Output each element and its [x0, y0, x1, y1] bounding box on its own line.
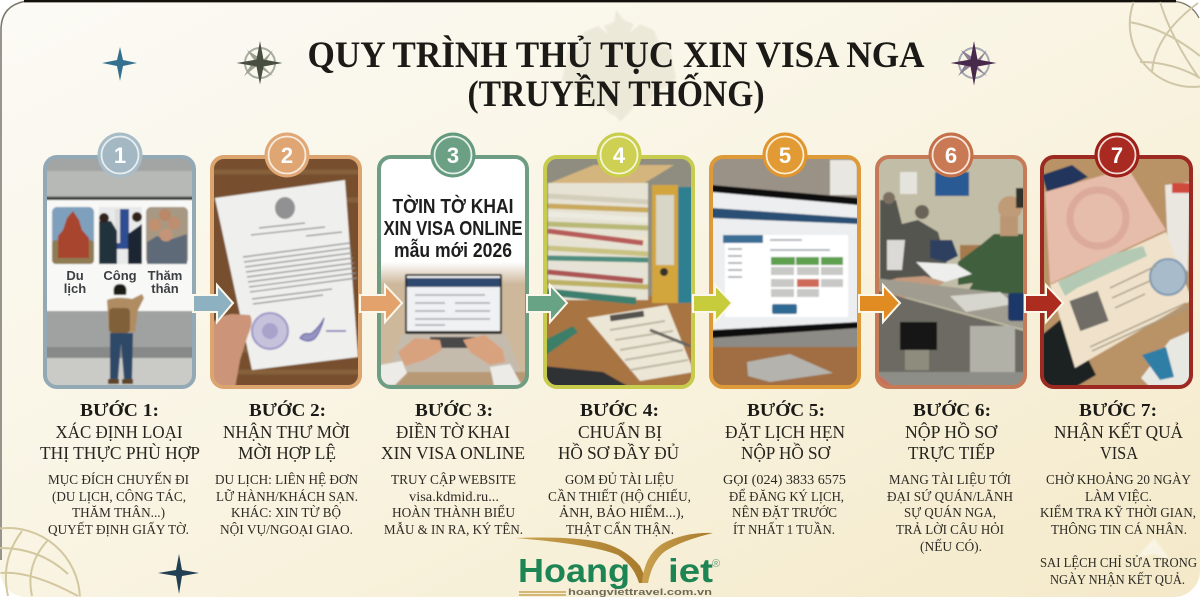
card frames [45, 157, 1191, 387]
decoration: globe top right [1129, 2, 1200, 87]
text block: step 6: BƯỚC 6: [913, 400, 991, 420]
text block: step 5: ĐỂ ĐĂNG KÝ LỊCH, [729, 488, 844, 505]
text block: step 4 [548, 400, 691, 538]
text block: step 7: THÔNG TIN CÁ NHÂN. [1051, 521, 1187, 538]
text: form headline: TỜIN TỜ KHAI [392, 194, 514, 218]
badge: number 6 [928, 132, 974, 178]
text: labels on the billboard: thân [151, 281, 179, 296]
text block: step 3: TRUY CẬP WEBSITE [391, 471, 516, 488]
text block: step 3: visa.kdmid.ru... [409, 490, 499, 505]
text block: step 7: BƯỚC 7: [1079, 400, 1157, 420]
text block: step 2: NHẬN THƯ MỜI [223, 421, 350, 442]
text block: step 6: (NẾU CÓ). [920, 538, 982, 555]
text block: step 7: LÀM VIỆC. [1085, 488, 1152, 505]
text block: step 6 [887, 400, 1013, 555]
text block: step 2: KHÁC: XIN TỪ BỘ [231, 504, 341, 521]
icon: registered mark: ® [712, 558, 720, 570]
badge: number 2 [264, 132, 310, 178]
text block: step 2: NỘI VỤ/NGOẠI GIAO. [220, 521, 353, 538]
decoration: globe bottom left [0, 528, 80, 596]
badge: number 5: 5 [779, 143, 791, 168]
panel: step 6 image [875, 155, 1027, 389]
text block: step 1: XÁC ĐỊNH LOẠI [56, 421, 183, 442]
panel: step 3 image [377, 155, 529, 389]
icon: compass rose right [950, 41, 996, 86]
text block: step 6: SỰ QUÁN NGA, [904, 504, 996, 521]
text block: step 6: ĐẠI SỨ QUÁN/LÃNH [887, 488, 1013, 505]
text: form headline [384, 194, 522, 262]
panel: step 1 image [43, 155, 196, 389]
text: labels on the billboard: lịch [64, 281, 86, 296]
text block: step 3: MẪU & IN RA, KÝ TÊN. [384, 520, 523, 538]
logo: Hoang Viet [515, 533, 720, 597]
panel: step 2 image [210, 155, 362, 389]
badge: number 5 [762, 132, 808, 178]
text block: step 5: NÊN ĐẶT TRƯỚC [732, 504, 837, 521]
title [308, 34, 925, 115]
icon: gold wings and V [515, 533, 713, 583]
badge: number 3 [430, 132, 476, 178]
badge: number 7 [1094, 132, 1140, 178]
panel: step 4 image [543, 155, 695, 389]
badge: number 4: 4 [613, 143, 626, 168]
badge: number 2: 2 [281, 143, 293, 168]
text block: step 4: HỒ SƠ ĐẦY ĐỦ [558, 442, 679, 463]
arrow: step 3 to 4 [527, 285, 567, 322]
decoration: faint Russian emblem watermark [562, 10, 676, 122]
text block: step 6: TRẢ LỜI CÂU HỎI [896, 521, 1004, 538]
text block: step 6: NỘP HỒ SƠ [905, 421, 998, 442]
text: company name [518, 552, 713, 589]
icon: blue four-point star [102, 47, 137, 81]
badge: number 7: 7 [1111, 143, 1123, 168]
title: QUY TRÌNH THỦ TỤC XIN VISA NGA [308, 34, 925, 76]
text block: step 7: NHẬN KẾT QUẢ [1054, 421, 1183, 442]
text block: step 4: CẦN THIẾT (HỘ CHIẾU, [548, 488, 691, 505]
text block: step 1: THĂM THÂN...) [72, 504, 165, 521]
text block: step 1: THỊ THỰC PHÙ HỢP [40, 442, 200, 463]
text block: step 6: MANG TÀI LIỆU TỚI [889, 471, 1011, 488]
text block: step 4: CHUẨN BỊ [578, 421, 662, 442]
title: (TRUYỀN THỐNG) [468, 71, 764, 115]
text block: step 7: VISA [1100, 443, 1138, 463]
arrow: step 6 to 7 [1025, 285, 1063, 322]
text block: step 1: QUYẾT ĐỊNH GIẤY TỜ. [48, 521, 189, 538]
text block: step 7: CHỜ KHOẢNG 20 NGÀY [1046, 471, 1191, 488]
text block: step 3: ĐIỀN TỜ KHAI [396, 421, 510, 442]
text: labels on the billboard [64, 268, 182, 296]
badge: number 3: 3 [447, 143, 459, 168]
text: form headline: mẫu mới 2026 [394, 238, 512, 262]
text block: step 1: (DU LỊCH, CÔNG TÁC, [52, 488, 186, 505]
text block: step 2: BƯỚC 2: [249, 400, 326, 420]
text block: step 5: ÍT NHẤT 1 TUẦN. [733, 521, 835, 538]
text block: step 7: NGÀY NHẬN KẾT QUẢ. [1050, 571, 1185, 588]
text block: step 5: ĐẶT LỊCH HẸN [725, 422, 845, 442]
text block: step 2: DU LỊCH: LIÊN HỆ ĐƠN [215, 471, 358, 488]
text block: step 1: BƯỚC 1: [80, 400, 159, 420]
text block: step 7 [1040, 400, 1197, 588]
text block: step 1 [40, 400, 200, 538]
text: labels on the billboard: Công [103, 268, 137, 283]
arrow: step 2 to 3 [360, 285, 402, 322]
text: website: hoangviettravel.com.vn [568, 587, 712, 597]
arrow: step 1 to 2 [193, 285, 233, 322]
text block: step 2: MỜI HỢP LỆ [238, 442, 336, 463]
text block: step 3 [381, 400, 525, 538]
text block: step 4: THẬT CẨN THẬN. [566, 521, 674, 538]
text: labels on the billboard: Du [66, 268, 84, 283]
text: form headline: XIN VISA ONLINE [384, 218, 522, 240]
badge: number 6: 6 [945, 143, 957, 168]
text block: step 5 [723, 400, 846, 538]
decoration: faint white peak near step 7 [1136, 538, 1170, 560]
text block: step 2: LỮ HÀNH/KHÁCH SẠN. [216, 488, 358, 505]
text block: step 2 [215, 400, 358, 538]
text block: step 5: NỘP HỒ SƠ [741, 442, 831, 463]
text block: step 1: MỤC ĐÍCH CHUYẾN ĐI [48, 471, 189, 488]
panel: step 5 image [709, 155, 861, 389]
text: website [519, 587, 712, 597]
icon: compass rose left [236, 41, 282, 84]
text: company name: Hoang [518, 552, 630, 589]
text: labels on the billboard: Thăm [148, 268, 182, 283]
badge: number 1 [98, 132, 142, 178]
text block: step 4: ẢNH, BẢO HIỂM...), [559, 504, 684, 521]
text block: step 3: BƯỚC 3: [415, 400, 493, 420]
icon: dark star bottom [158, 554, 199, 594]
arrow: step 5 to 6 [859, 285, 900, 322]
badge: number 4 [596, 132, 642, 178]
text block: step 4: BƯỚC 4: [580, 400, 659, 420]
text block: step 5: BƯỚC 5: [747, 400, 825, 420]
text block: step 6: TRỰC TIẾP [908, 442, 995, 463]
text block: step 3: XIN VISA ONLINE [381, 443, 525, 463]
arrow: step 4 to 5 [693, 285, 732, 322]
text: company name: iet [668, 552, 713, 589]
text block: step 5: GỌI (024) 3833 6575 [723, 473, 846, 488]
panel: step 7 image [1040, 155, 1193, 390]
text block: step 3: HOÀN THÀNH BIỂU [392, 504, 515, 521]
text block: step 4: GOM ĐỦ TÀI LIỆU [565, 471, 674, 488]
badge: number 1: 1 [114, 143, 126, 168]
